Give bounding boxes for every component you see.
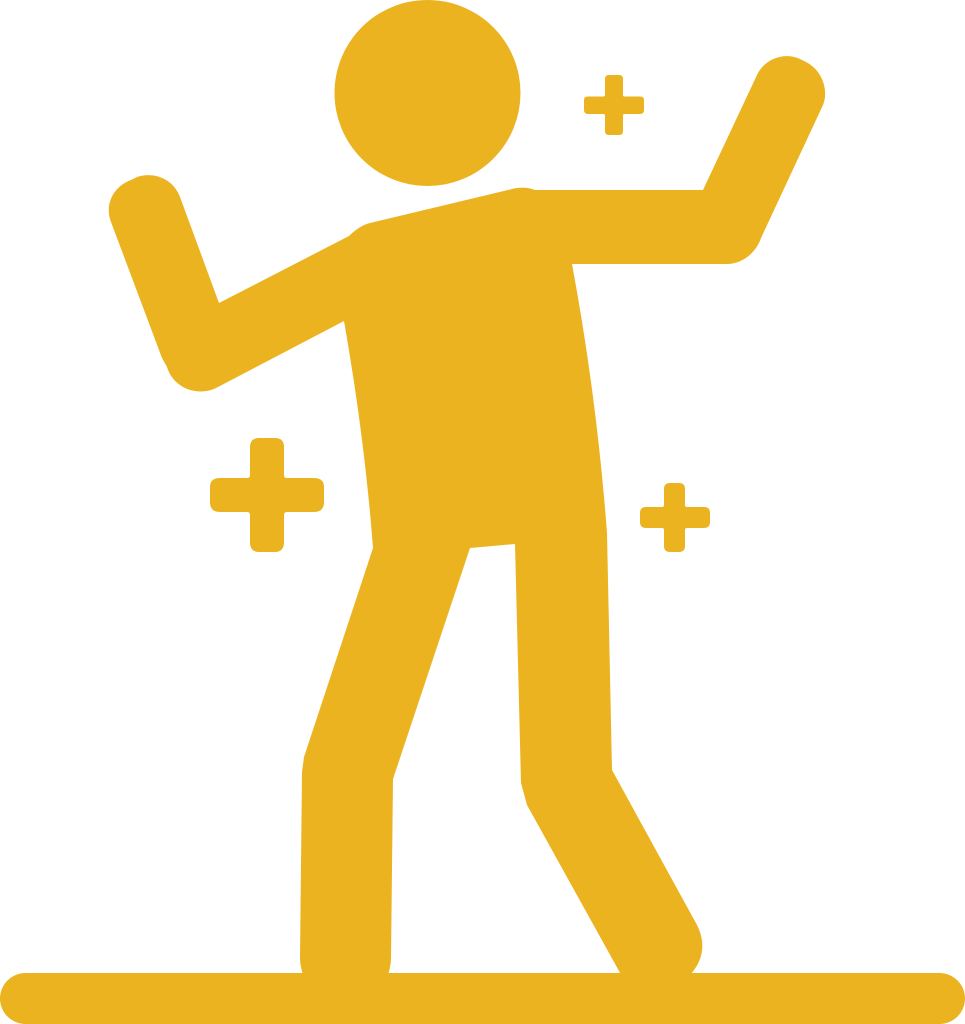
- icon: body with arms and legs: [109, 56, 825, 975]
- icon: large sparkle left: [210, 438, 324, 552]
- icon: small sparkle top right: [584, 75, 644, 135]
- icon: head: [334, 0, 520, 186]
- icon: ground line: [0, 973, 965, 1024]
- icon: medium sparkle right: [640, 483, 710, 552]
